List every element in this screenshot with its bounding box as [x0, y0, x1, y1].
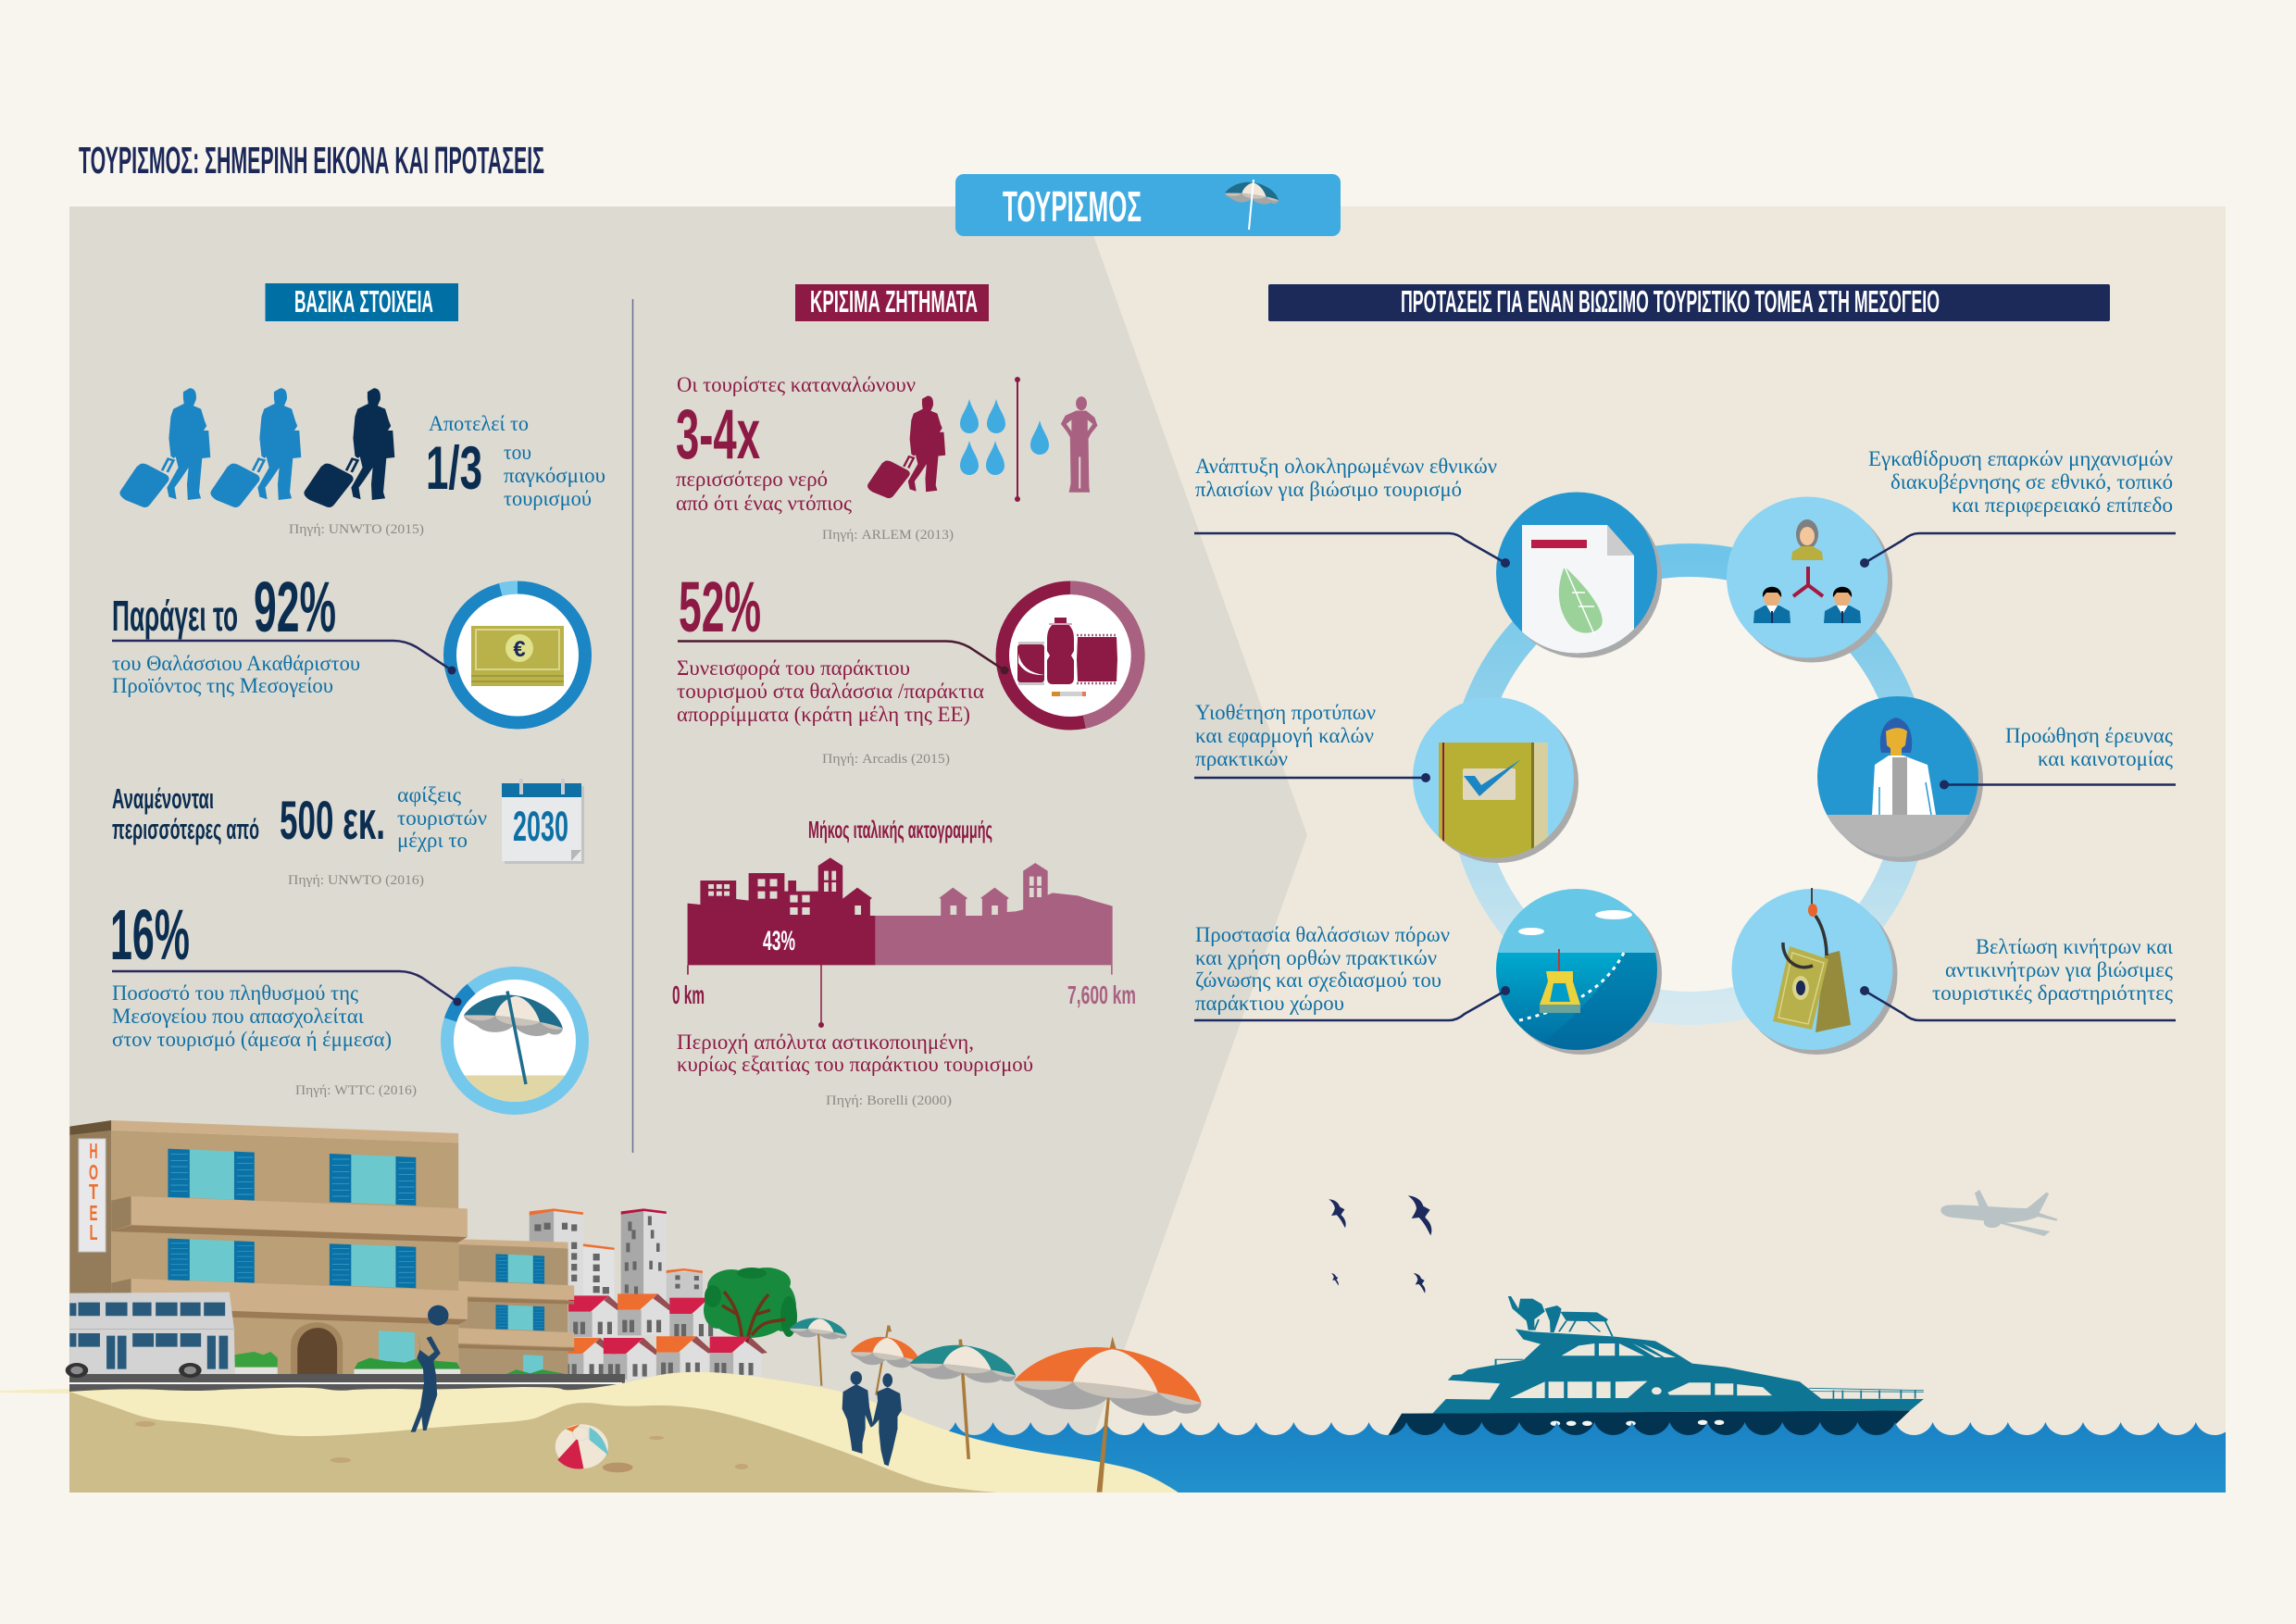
proposal 6: incentives	[1731, 888, 2176, 1055]
heading: proposals	[1268, 284, 2110, 321]
proposal 3: standards: Υιοθέτηση προτύπων	[1195, 701, 1376, 724]
stat: 52 percent marine litter: 52%	[679, 568, 761, 647]
stat: 500 million arrivals: περισσότερες από	[112, 813, 259, 845]
illustration: sand	[0, 1372, 1179, 1493]
proposal 3: standards: και εφαρμογή καλών	[1195, 724, 1374, 747]
proposal 6: incentives: τουριστικές δραστηριότητες	[1932, 981, 2173, 1005]
proposal 4: research	[1815, 696, 2176, 862]
stat: 52 percent marine litter	[677, 568, 984, 726]
stat: 500 million arrivals: Αναμένονται	[112, 782, 214, 815]
stat: water consumption: περισσότερο νερό	[676, 468, 828, 491]
ring connecting proposals	[1466, 560, 1914, 1008]
section tab: tourism: ΤΟΥΡΙΣΜΟΣ	[1003, 182, 1142, 231]
proposal 3: standards	[1194, 697, 1578, 872]
illustration: beach umbrellas	[790, 1318, 1016, 1459]
hotel sign: H	[89, 1139, 98, 1163]
text: urbanised coastline	[677, 1031, 1033, 1076]
proposal 2: governance: Εγκαθίδρυση επαρκών μηχανισμών	[1868, 447, 2173, 470]
proposal 6: incentives: Βελτίωση κινήτρων και	[1976, 935, 2174, 958]
stat: water consumption	[676, 373, 916, 515]
title: ΤΟΥΡΙΣΜΟΣ: ΣΗΜΕΡΙΝΗ ΕΙΚΟΝΑ ΚΑΙ ΠΡΟΤΑΣΕΙΣ	[79, 139, 544, 181]
heading: critical issues	[795, 284, 989, 321]
proposal 3: standards: πρακτικών	[1195, 747, 1288, 770]
illustration: skyline towers and houses	[530, 1208, 728, 1340]
stat: 16 percent employment	[110, 895, 392, 1051]
stat: 500 million arrivals	[112, 782, 487, 852]
illustration: front row of houses	[560, 1336, 767, 1380]
proposal 5: marine protection: παράκτιου χώρου	[1195, 992, 1344, 1015]
stat: one third of world tourism	[426, 412, 605, 510]
icon: umbrella ring	[444, 973, 583, 1113]
stat: one third of world tourism: παγκόσμιου	[504, 464, 605, 487]
source: Πηγή: WTTC (2016)	[295, 1083, 417, 1098]
proposal 1: frameworks: πλαισίων για βιώσιμο τουρισμό	[1195, 478, 1462, 501]
stat: 500 million arrivals: μέχρι το	[397, 829, 468, 852]
hotel sign: E	[89, 1201, 98, 1225]
illustration: tree	[704, 1268, 797, 1344]
stat: 92 percent of GDP	[112, 568, 360, 697]
chart: coastline skyline bar	[672, 857, 1136, 1028]
stat: 500 million arrivals: 500 εκ.	[280, 791, 385, 851]
section tab: tourism	[955, 174, 1341, 236]
illustration: hotel	[69, 1120, 574, 1375]
leader line: 92 percent	[112, 641, 455, 674]
stat: water consumption: από ότι ένας ντόπιος	[676, 492, 852, 515]
stat: 52 percent marine litter: απορρίμματα (κράτη μέλη της ΕΕ)	[677, 703, 970, 726]
icon: tourist vs local water use	[867, 377, 1097, 502]
stat: 92 percent of GDP: Προϊόντος της Μεσογείου	[112, 674, 333, 697]
heading: basic facts	[265, 283, 458, 321]
heading: basic facts: ΒΑΣΙΚΑ ΣΤΟΙΧΕΙΑ	[294, 284, 433, 319]
source: Πηγή: Arcadis (2015)	[822, 752, 950, 767]
stat: 16 percent employment: 16%	[110, 895, 190, 975]
chart: coastline skyline bar: 7,600 km	[1067, 981, 1136, 1009]
stat: 92 percent of GDP: Παράγει το	[112, 592, 238, 640]
proposal 5: marine protection: Προστασία θαλάσσιων πόρων	[1195, 923, 1450, 946]
icon: calendar 2030: 2030	[513, 803, 568, 850]
stat: 500 million arrivals: αφίξεις	[397, 783, 461, 806]
proposal 5: marine protection	[1194, 889, 1666, 1055]
panel: background	[69, 206, 2226, 1493]
text: urbanised coastline: κυρίως εξαιτίας του παράκτιου τουρισμού	[677, 1053, 1033, 1076]
text: urbanised coastline: Περιοχή απόλυτα αστικοποιημένη,	[677, 1031, 974, 1054]
hotel sign: T	[89, 1180, 98, 1204]
stat: water consumption: Οι τουρίστες καταναλώνουν	[677, 373, 916, 396]
hotel sign: L	[89, 1220, 98, 1244]
chart title: Italian coastline: Μήκος ιταλικής ακτογραμμής	[808, 816, 992, 843]
illustration: bus	[66, 1293, 235, 1378]
stat: 52 percent marine litter: τουρισμού στα θαλάσσια /παράκτια	[677, 680, 984, 703]
source: Πηγή: UNWTO (2016)	[288, 873, 424, 888]
proposal 6: incentives: αντικινήτρων για βιώσιμες	[1945, 958, 2173, 981]
illustration: boat	[1388, 1296, 1924, 1435]
illustration: large umbrella	[1014, 1336, 1202, 1493]
proposal 2: governance	[1727, 447, 2176, 663]
source: Πηγή: UNWTO (2015)	[289, 522, 424, 537]
source: Πηγή: Borelli (2000)	[826, 1093, 952, 1108]
illustration: plane	[1940, 1190, 2057, 1236]
stat: one third of world tourism: 1/3	[426, 433, 482, 502]
stat: 92 percent of GDP: 92%	[254, 568, 336, 647]
proposal 5: marine protection: ζώνωσης και σχεδιασμού του	[1195, 968, 1441, 992]
illustration: road	[69, 1374, 625, 1393]
proposal 2: governance: διακυβέρνησης σε εθνικό, τοπικό	[1890, 470, 2173, 493]
heading: critical issues: ΚΡΙΣΙΜΑ ΖΗΤΗΜΑΤΑ	[810, 284, 978, 319]
source: Πηγή: ARLEM (2013)	[822, 528, 954, 543]
proposal 1: frameworks	[1194, 455, 1662, 667]
illustration: beach ball	[555, 1424, 632, 1472]
proposal 4: research: Προώθηση έρευνας	[2005, 724, 2173, 747]
icon: money ring	[450, 587, 585, 722]
leader line: 52 percent	[678, 641, 1009, 674]
illustration: volleyball player	[411, 1305, 448, 1432]
proposal 4: research: και καινοτομίας	[2038, 747, 2173, 770]
stat: 16 percent employment: Ποσοστό του πληθυσμού της	[112, 981, 358, 1005]
stat: 52 percent marine litter: Συνεισφορά του παράκτιου	[677, 656, 910, 680]
stat: 92 percent of GDP: του Θαλάσσιου Ακαθάριστου	[112, 652, 360, 675]
stat: one third of world tourism: τουρισμού	[504, 487, 592, 510]
panel: grey arrow background	[69, 206, 1307, 1444]
stat: 16 percent employment: στον τουρισμό (άμεσα ή έμμεσα)	[112, 1028, 392, 1051]
proposal 2: governance: και περιφερειακό επίπεδο	[1952, 493, 2173, 517]
stat: water consumption: 3-4x	[676, 395, 760, 474]
proposal 1: frameworks: Ανάπτυξη ολοκληρωμένων εθνικών	[1195, 455, 1497, 478]
leader line: 16 percent	[112, 971, 461, 1006]
hotel sign	[79, 1139, 106, 1252]
icon: money ring: €	[513, 637, 526, 662]
chart: coastline skyline bar: 43%	[763, 926, 795, 956]
icon: litter ring	[1003, 588, 1138, 723]
hotel sign: O	[89, 1160, 98, 1184]
icon: calendar 2030	[502, 779, 584, 864]
proposal 5: marine protection: και χρήση ορθών πρακτικών	[1195, 946, 1437, 969]
icon: three travellers	[119, 388, 394, 507]
illustration: couple	[842, 1371, 902, 1466]
illustration: sea	[917, 1422, 2233, 1493]
illustration: birds	[1329, 1195, 1431, 1293]
stat: one third of world tourism: του	[504, 441, 531, 464]
stat: one third of world tourism: Αποτελεί το	[429, 412, 529, 435]
chart: coastline skyline bar: 0 km	[672, 981, 705, 1009]
stat: 500 million arrivals: τουριστών	[397, 806, 487, 830]
stat: 16 percent employment: Μεσογείου που απασχολείται	[112, 1005, 365, 1028]
